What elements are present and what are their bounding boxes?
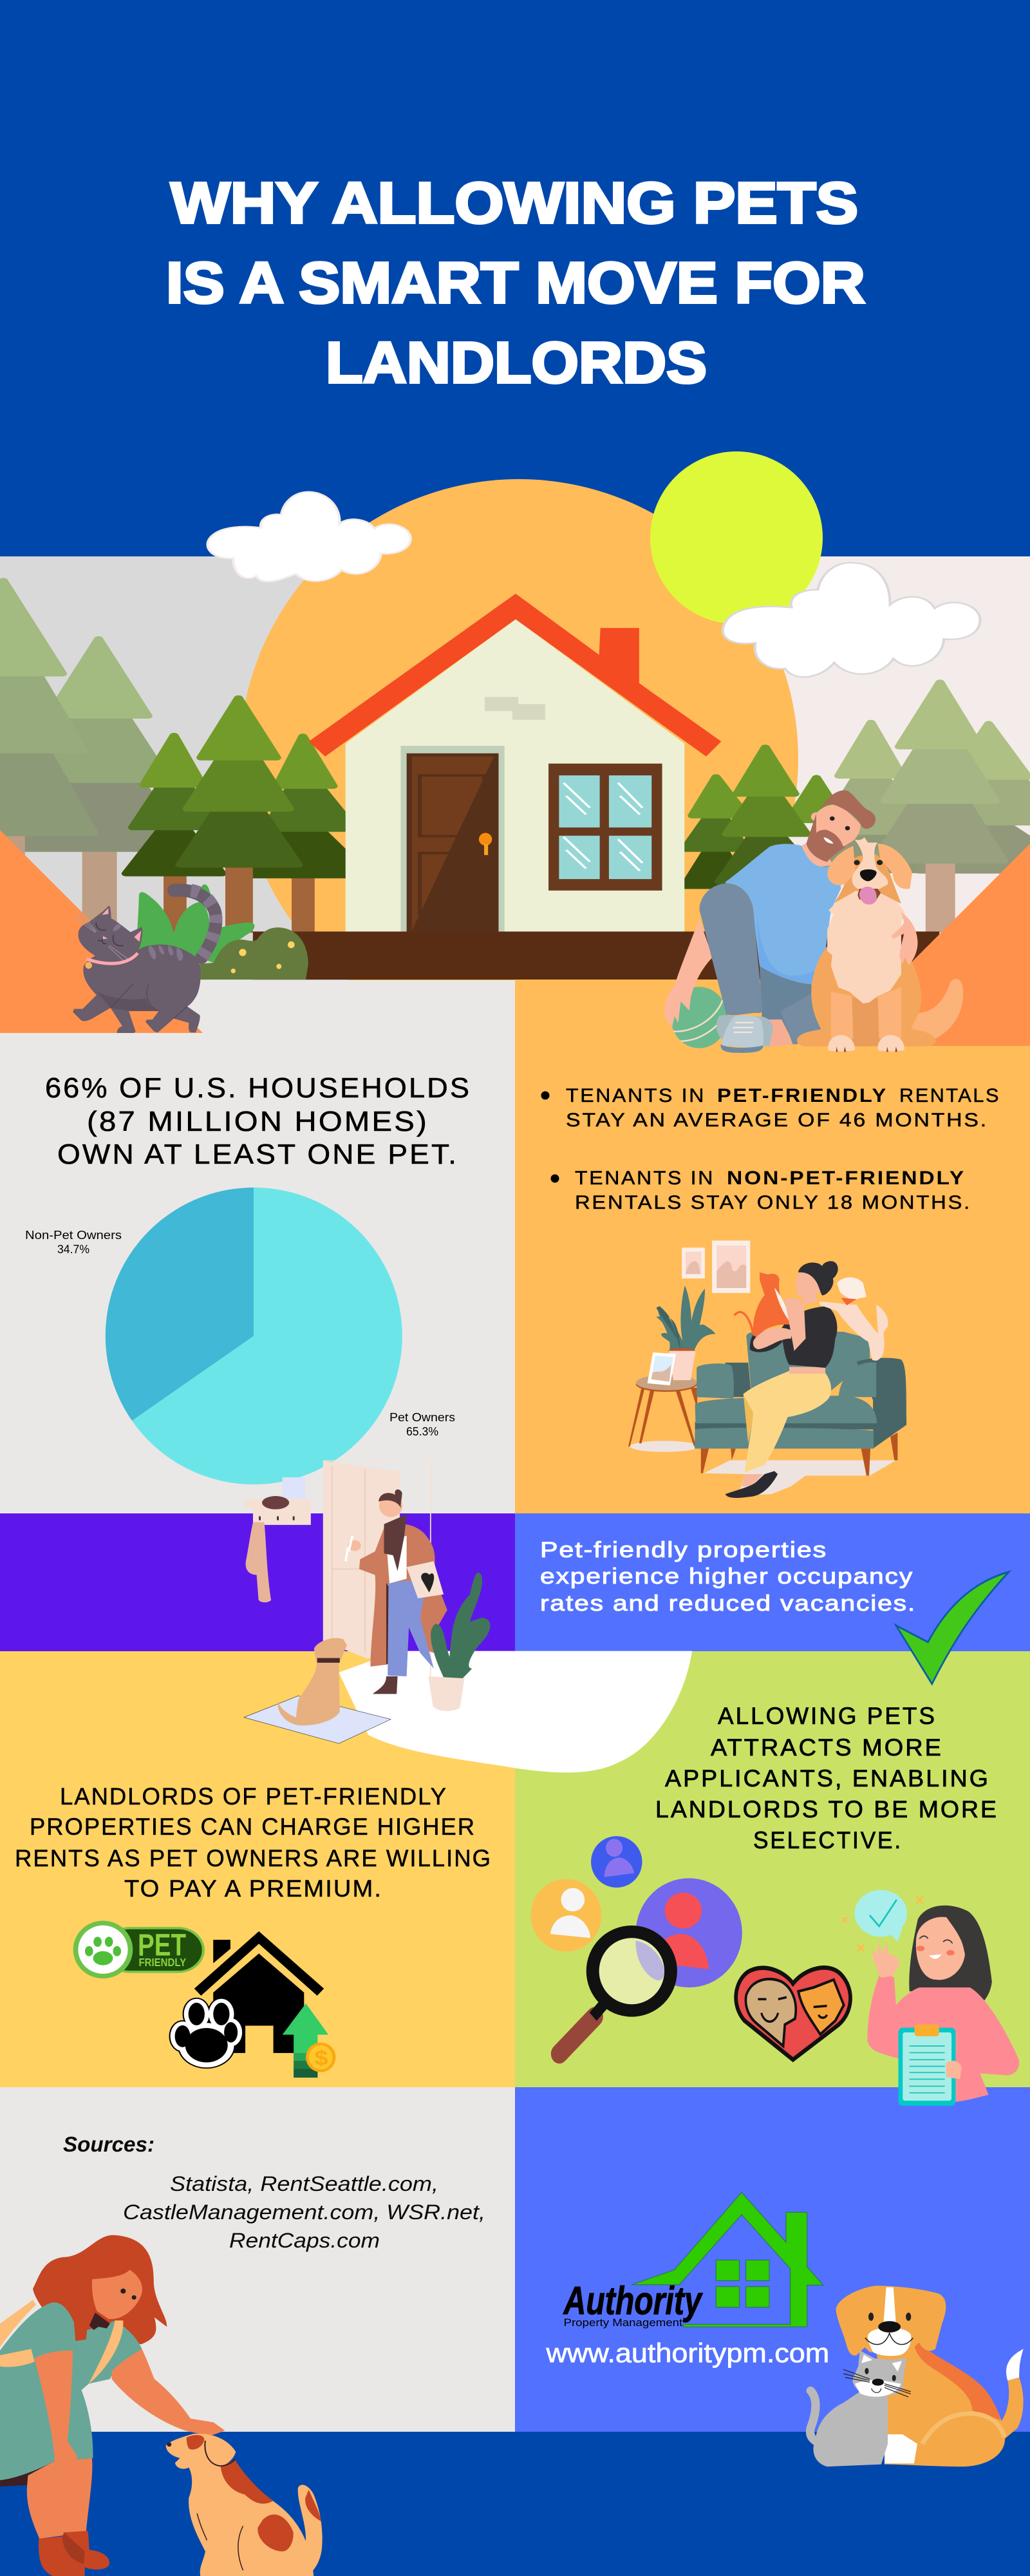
- title: LANDLORDS: [326, 331, 707, 395]
- cat: [73, 890, 216, 1033]
- title: WHY ALLOWING PETS: [171, 171, 858, 236]
- left cloud: [207, 492, 411, 582]
- pet friendly badge: PET: [138, 1928, 186, 1963]
- wall pictures: [682, 1240, 750, 1293]
- website url: www.authoritypm.com: [545, 2338, 829, 2368]
- speech bubble with check: [842, 1890, 923, 1951]
- occupancy text: rates and reduced vacancies.: [540, 1591, 916, 1616]
- applicants text: ATTRACTS MORE: [711, 1734, 943, 1761]
- sources: RentCaps.com: [229, 2229, 380, 2252]
- dog with cat: [810, 2286, 1024, 2467]
- pie label: non-pet owners: [25, 1229, 122, 1256]
- dark green trees right: [684, 748, 844, 886]
- logo wordmark: Property Management: [564, 2316, 682, 2329]
- right orange hill: [828, 844, 1030, 1046]
- panel: more applicants (green): [515, 1651, 1030, 2087]
- orange user badge: [530, 1879, 601, 1951]
- applicants text: ALLOWING PETS: [718, 1703, 937, 1729]
- panel: higher rents (yellow): [0, 1651, 515, 2087]
- white floor blob: [339, 1651, 692, 1772]
- illustration: woman petting dog: [0, 2235, 323, 2576]
- illustrations: applicants search and girl: [530, 1572, 1019, 2106]
- yellow sun circle: [650, 451, 823, 624]
- pie label: non-pet owners: Non-Pet Owners: [25, 1229, 122, 1242]
- bullet: non-pet-friendly tenants: TENANTS IN: [575, 1168, 715, 1189]
- pie label: non-pet owners: 34.7%: [57, 1243, 89, 1256]
- woman with keys: [346, 1490, 447, 1694]
- dog: [797, 837, 963, 1052]
- woman's hand: [784, 1298, 806, 1351]
- floor shadows: [630, 1441, 896, 1496]
- households heading: [45, 1072, 471, 1170]
- panel: tenants stay (orange): [515, 980, 1030, 1513]
- logo wordmark: [563, 2279, 703, 2329]
- white dog: [819, 1277, 888, 1361]
- title: [166, 171, 865, 395]
- pie label: pet owners: [389, 1411, 455, 1438]
- panel: households (grey): [0, 980, 515, 1513]
- black house icon: [194, 1931, 324, 2053]
- illustration: woman on sofa: [628, 1240, 906, 1498]
- pie label: pet owners: 65.3%: [406, 1425, 438, 1438]
- pet friendly badge: FRIENDLY: [138, 1956, 186, 1969]
- plant back leaves: [201, 884, 254, 963]
- woman: [0, 2235, 225, 2576]
- side table and plant: [628, 1285, 715, 1446]
- bullet: pet-friendly tenants: PET-FRIENDLY: [717, 1085, 888, 1106]
- bush: [200, 927, 308, 980]
- panel: purple band: [0, 1513, 515, 1651]
- dark green trees left: [126, 698, 368, 933]
- house scene: [0, 492, 1030, 980]
- left orange hill: [0, 830, 203, 1033]
- scene backdrop: left grey and right pink: [0, 556, 1030, 981]
- applicants text: APPLICANTS, ENABLING: [665, 1765, 990, 1792]
- applicants text: [655, 1703, 998, 1853]
- blue user badge: [591, 1836, 642, 1888]
- rents text: LANDLORDS OF PET-FRIENDLY: [60, 1783, 447, 1810]
- bush, plant and cat: [73, 884, 308, 1033]
- bullet: pet-friendly tenants: TENANTS IN: [566, 1085, 706, 1106]
- paw icon: [169, 1998, 243, 2069]
- tenure bullets: [541, 1085, 1000, 1213]
- logo and url: [545, 2192, 1024, 2467]
- sources: [63, 2132, 485, 2252]
- rents text: RENTS AS PET OWNERS ARE WILLING: [15, 1845, 492, 1871]
- green up arrow with coin: [283, 2003, 335, 2078]
- occupancy text: [540, 1538, 916, 1616]
- heart with dog and cat: [736, 1967, 850, 2060]
- orange sun circle: [239, 479, 798, 1038]
- panel: occupancy (blue): [515, 1513, 1030, 1651]
- households heading: (87 MILLION HOMES): [87, 1106, 429, 1137]
- panel: sources (grey): [0, 2087, 515, 2432]
- rents text: TO PAY A PREMIUM.: [124, 1875, 382, 1902]
- slice: pet owners: [132, 1188, 402, 1484]
- sources: CastleManagement.com, WSR.net,: [123, 2201, 485, 2224]
- illustration: woman at door with dog: [73, 1461, 692, 2078]
- woman: [726, 1261, 838, 1498]
- bullet: non-pet-friendly tenants: RENTALS STAY ONLY 18 MONTHS.: [575, 1192, 971, 1213]
- sources: Statista, RentSeattle.com,: [170, 2172, 438, 2195]
- potted plant: [428, 1573, 490, 1711]
- occupancy text: experience higher occupancy: [540, 1564, 913, 1589]
- bullet: pet-friendly tenants: STAY AN AVERAGE OF 46 MONTHS.: [566, 1110, 988, 1131]
- pet friendly badge: [73, 1920, 203, 1978]
- ball: [671, 987, 727, 1048]
- window: [548, 764, 662, 891]
- man's arm on ball: [664, 919, 713, 1027]
- households heading: OWN AT LEAST ONE PET.: [57, 1139, 458, 1170]
- bullet: pet-friendly tenants: RENTALS: [899, 1085, 1000, 1106]
- shirt: [725, 844, 841, 984]
- dog: [166, 2434, 323, 2576]
- pie chart: [106, 1188, 402, 1484]
- bullet: non-pet-friendly tenants: [551, 1168, 971, 1213]
- households heading: 66% OF U.S. HOUSEHOLDS: [45, 1072, 471, 1104]
- title: IS A SMART MOVE FOR: [166, 251, 865, 316]
- man's arm over dog: [892, 913, 918, 965]
- plant front leaves: [137, 892, 209, 958]
- panel: logo (blue): [515, 2087, 1030, 2432]
- purple user badge: [636, 1879, 742, 1987]
- coat hanger shelf: [245, 1477, 311, 1602]
- right cloud: [723, 563, 980, 677]
- house: [309, 594, 721, 931]
- slice: non-pet owners: [106, 1188, 254, 1421]
- dog on mat: [244, 1638, 391, 1743]
- door: [323, 1461, 431, 1676]
- green check mark: [896, 1572, 1009, 1684]
- bullet: pet-friendly tenants: [541, 1085, 1000, 1131]
- applicants text: LANDLORDS TO BE MORE: [655, 1796, 998, 1823]
- man with dog: [664, 790, 963, 1053]
- applicants text: SELECTIVE.: [753, 1827, 903, 1853]
- pie label: pet owners: Pet Owners: [389, 1411, 455, 1424]
- man's head: [801, 790, 876, 867]
- pale trees right: [814, 683, 1030, 933]
- pale trees left: [0, 581, 187, 933]
- magnifying glass: [559, 1926, 677, 2054]
- bullet: non-pet-friendly tenants: NON-PET-FRIENDLY: [727, 1168, 966, 1189]
- sofa: [695, 1331, 906, 1475]
- brown ground strip: [253, 931, 939, 980]
- trousers: [699, 884, 821, 1046]
- rents text: PROPERTIES CAN CHARGE HIGHER: [30, 1814, 476, 1840]
- door: [400, 746, 505, 931]
- logo house: [632, 2192, 823, 2327]
- orange cat: [735, 1273, 791, 1337]
- logo wordmark: Authority: [563, 2279, 703, 2323]
- girl with clipboard: [867, 1906, 1019, 2106]
- sources: Sources:: [63, 2132, 154, 2156]
- rents text: [15, 1783, 492, 1902]
- shoe: [716, 1016, 773, 1053]
- green up arrow with coin: $: [314, 2046, 328, 2070]
- occupancy text: Pet-friendly properties: [540, 1538, 827, 1562]
